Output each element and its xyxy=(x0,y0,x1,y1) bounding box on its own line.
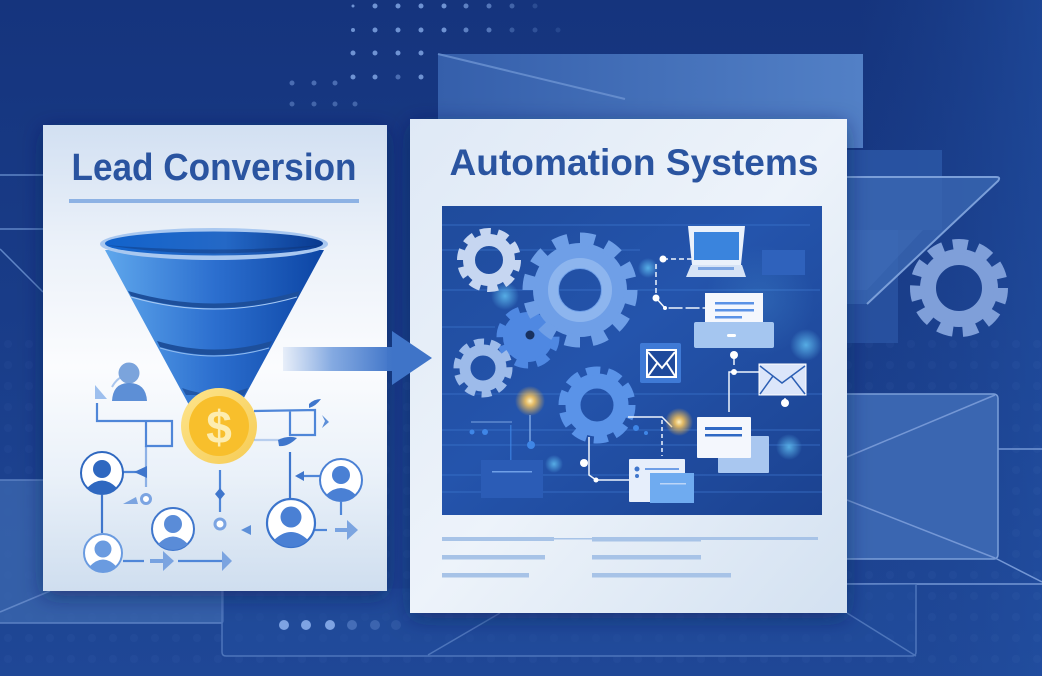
flow diagram: connectors xyxy=(97,375,350,561)
icon: person C xyxy=(152,508,194,550)
heading: automation systems: Automation Systems xyxy=(450,142,818,183)
gear 5 xyxy=(563,371,631,439)
glow: orange lights xyxy=(515,386,693,436)
icon: person D xyxy=(267,499,315,547)
icon: person A xyxy=(81,452,123,494)
icon: mail tile xyxy=(640,343,681,383)
icon: stacked cards bottom xyxy=(629,459,694,503)
panel: automation systems xyxy=(410,119,847,613)
icon: envelope xyxy=(759,364,806,395)
heading: lead conversion: Lead Conversion xyxy=(72,147,356,189)
small nodes left xyxy=(470,422,648,460)
icon: person E xyxy=(320,459,362,501)
dot pattern: bottom xyxy=(279,620,401,630)
gear 4 xyxy=(458,342,508,394)
dark box lower left xyxy=(481,460,543,498)
text lines xyxy=(442,537,818,578)
icon: document tray xyxy=(694,293,774,348)
funnel xyxy=(100,228,328,405)
connector nodes xyxy=(527,256,789,482)
heading underline xyxy=(69,199,359,203)
flow diagram: arrowheads xyxy=(95,385,358,571)
panel: lead conversion xyxy=(43,125,387,591)
gear 1 xyxy=(461,232,517,288)
icon: laptop xyxy=(686,226,746,277)
gear 2 xyxy=(529,239,631,341)
connectors xyxy=(530,259,785,480)
icon: background gear xyxy=(917,246,1001,330)
icon: gold coin xyxy=(181,388,257,464)
small box xyxy=(762,250,805,275)
icon: person top xyxy=(112,362,147,401)
icon: person B xyxy=(84,534,122,572)
automation illustration xyxy=(442,206,822,515)
dot pattern: top xyxy=(290,4,560,106)
icon: gold coin: $ xyxy=(206,401,232,453)
gear 3 xyxy=(501,310,555,364)
icon: stacked cards right xyxy=(697,417,769,473)
arrow xyxy=(283,331,432,385)
